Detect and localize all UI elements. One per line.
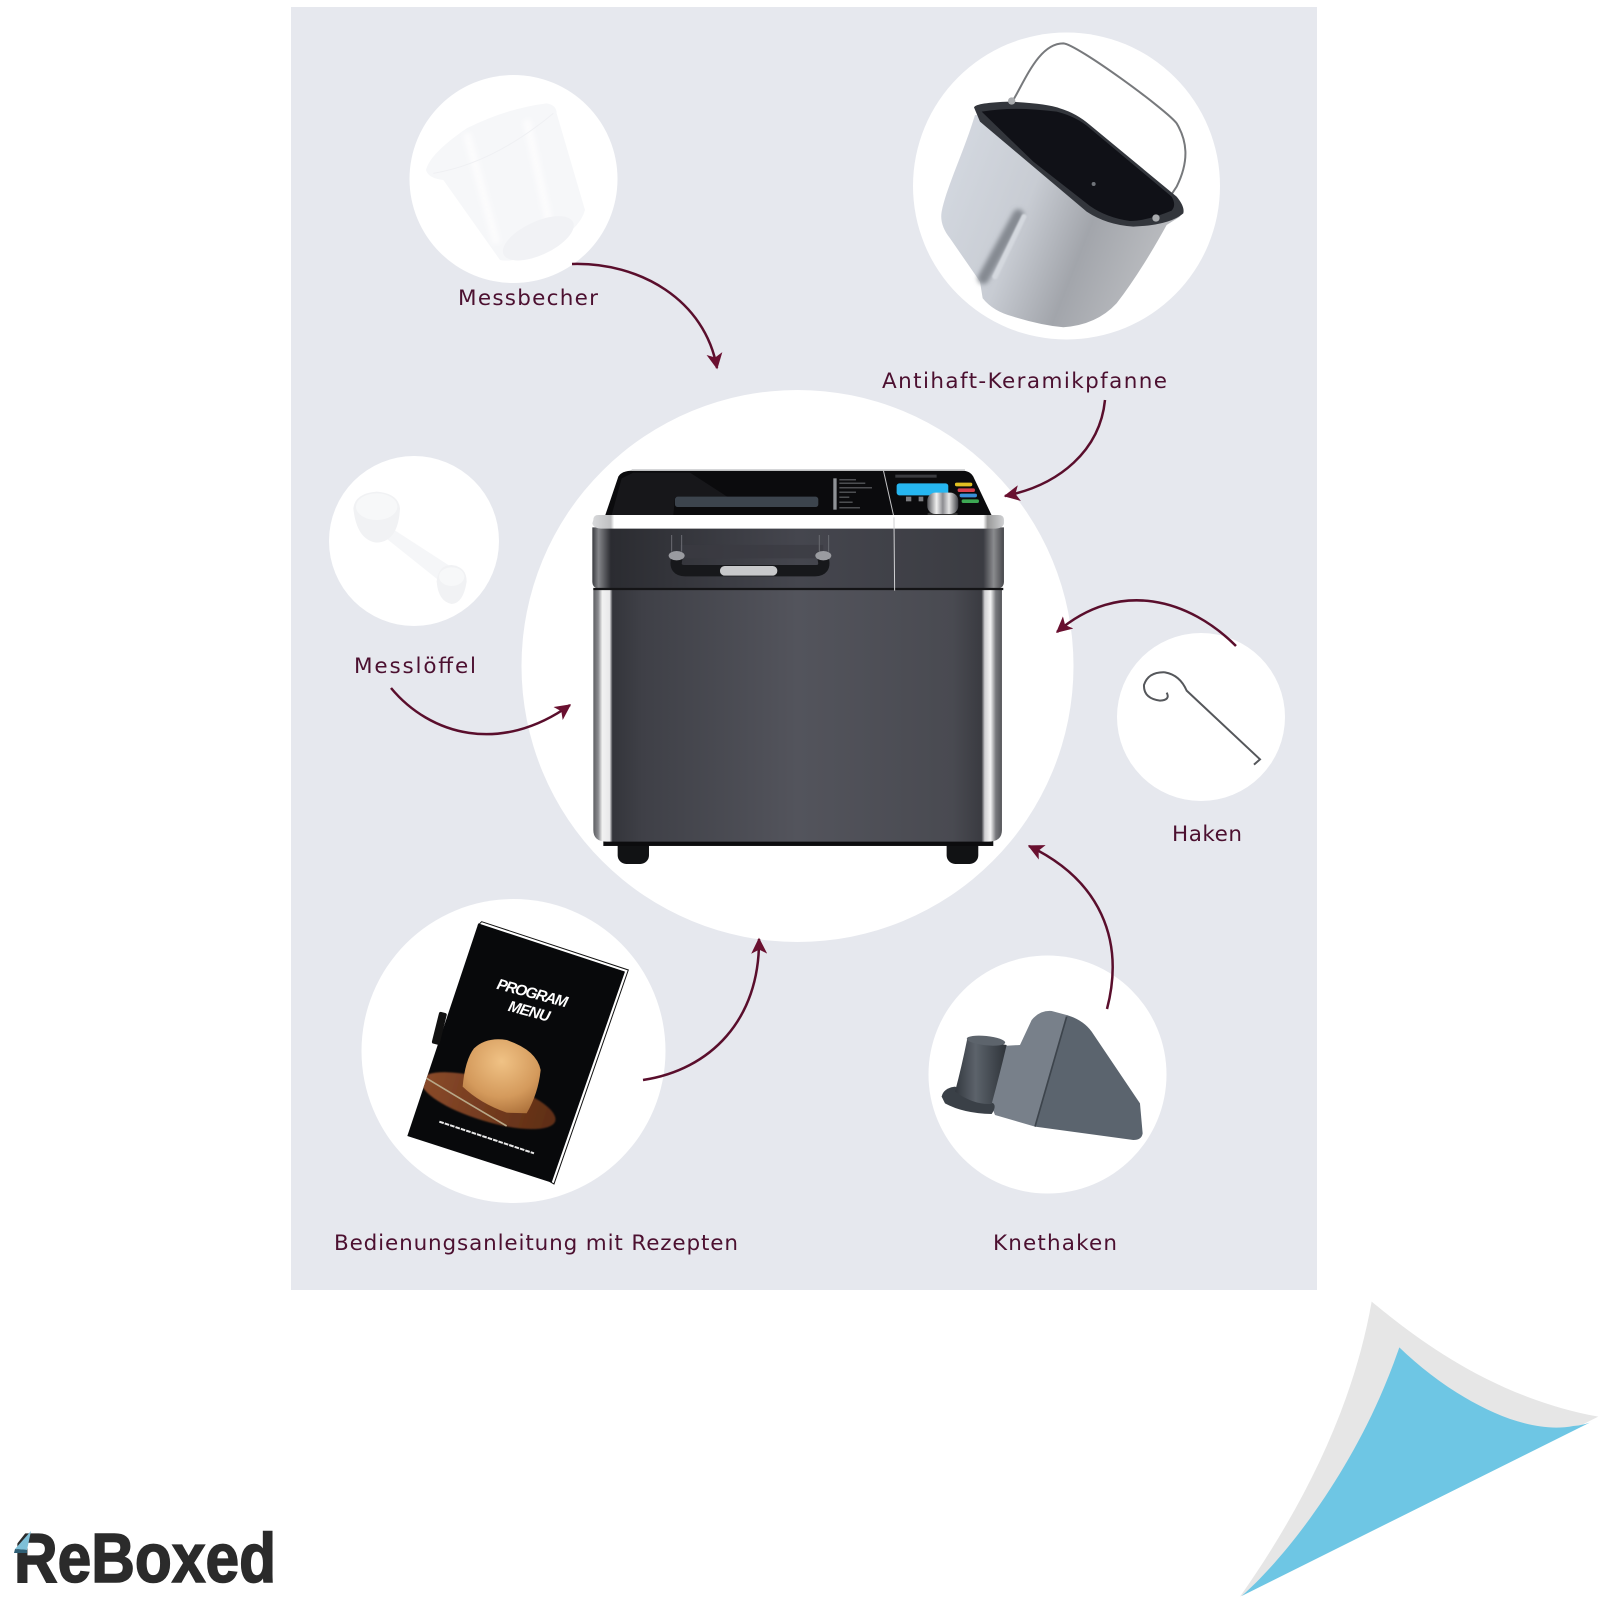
- arrow: paddle to machine: [1029, 846, 1113, 1009]
- book subtitle: MENU: [506, 998, 553, 1026]
- label: Messlöffel: Messlöffel: [354, 654, 476, 679]
- label: Messbecher: Messbecher: [458, 286, 598, 311]
- central circle with bread machine: [522, 390, 1074, 942]
- machine feet: [618, 837, 978, 864]
- circle: wire hook: [1117, 633, 1285, 801]
- circle: kneading paddle: [928, 956, 1166, 1194]
- icon: kneading paddle: [942, 1011, 1143, 1140]
- icon: measuring spoon: [353, 492, 467, 604]
- arrow: spoon to machine: [391, 688, 570, 734]
- circle: instruction book: [362, 899, 666, 1203]
- arrow: pan to machine: [1005, 400, 1105, 496]
- circle: bread pan: [913, 32, 1220, 340]
- handle: [669, 551, 831, 576]
- background panel: [291, 7, 1317, 1290]
- label: Antihaft-Keramikpfanne: Antihaft-Keramikpfanne: [882, 369, 1167, 394]
- page curl corner graphic: [1240, 1302, 1598, 1597]
- icon: recipe manual book: [407, 922, 628, 1184]
- label: Knethaken: Knethaken: [993, 1231, 1117, 1256]
- circle: measuring cup: [410, 75, 618, 283]
- circle: measuring spoon: [329, 456, 499, 626]
- arrow: hook to machine: [1057, 600, 1236, 646]
- bread machine illustration: [592, 470, 1004, 864]
- icon: ceramic pan with handle: [941, 43, 1185, 327]
- arrow: cup to machine: [572, 264, 717, 368]
- label: Bedienungsanleitung mit Rezepten: Bedienungsanleitung mit Rezepten: [334, 1231, 738, 1256]
- logo blue fold: [10, 1526, 31, 1553]
- logo wordmark: ReBoxed: [14, 1519, 276, 1597]
- arrow: manual to machine: [643, 939, 759, 1080]
- logo: ReBoxed: [10, 1519, 276, 1597]
- icon: wire hook: [1144, 672, 1260, 765]
- label: Haken: Haken: [1172, 822, 1242, 847]
- book title: PROGRAM: [495, 976, 571, 1012]
- icon: measuring cup: [426, 103, 585, 270]
